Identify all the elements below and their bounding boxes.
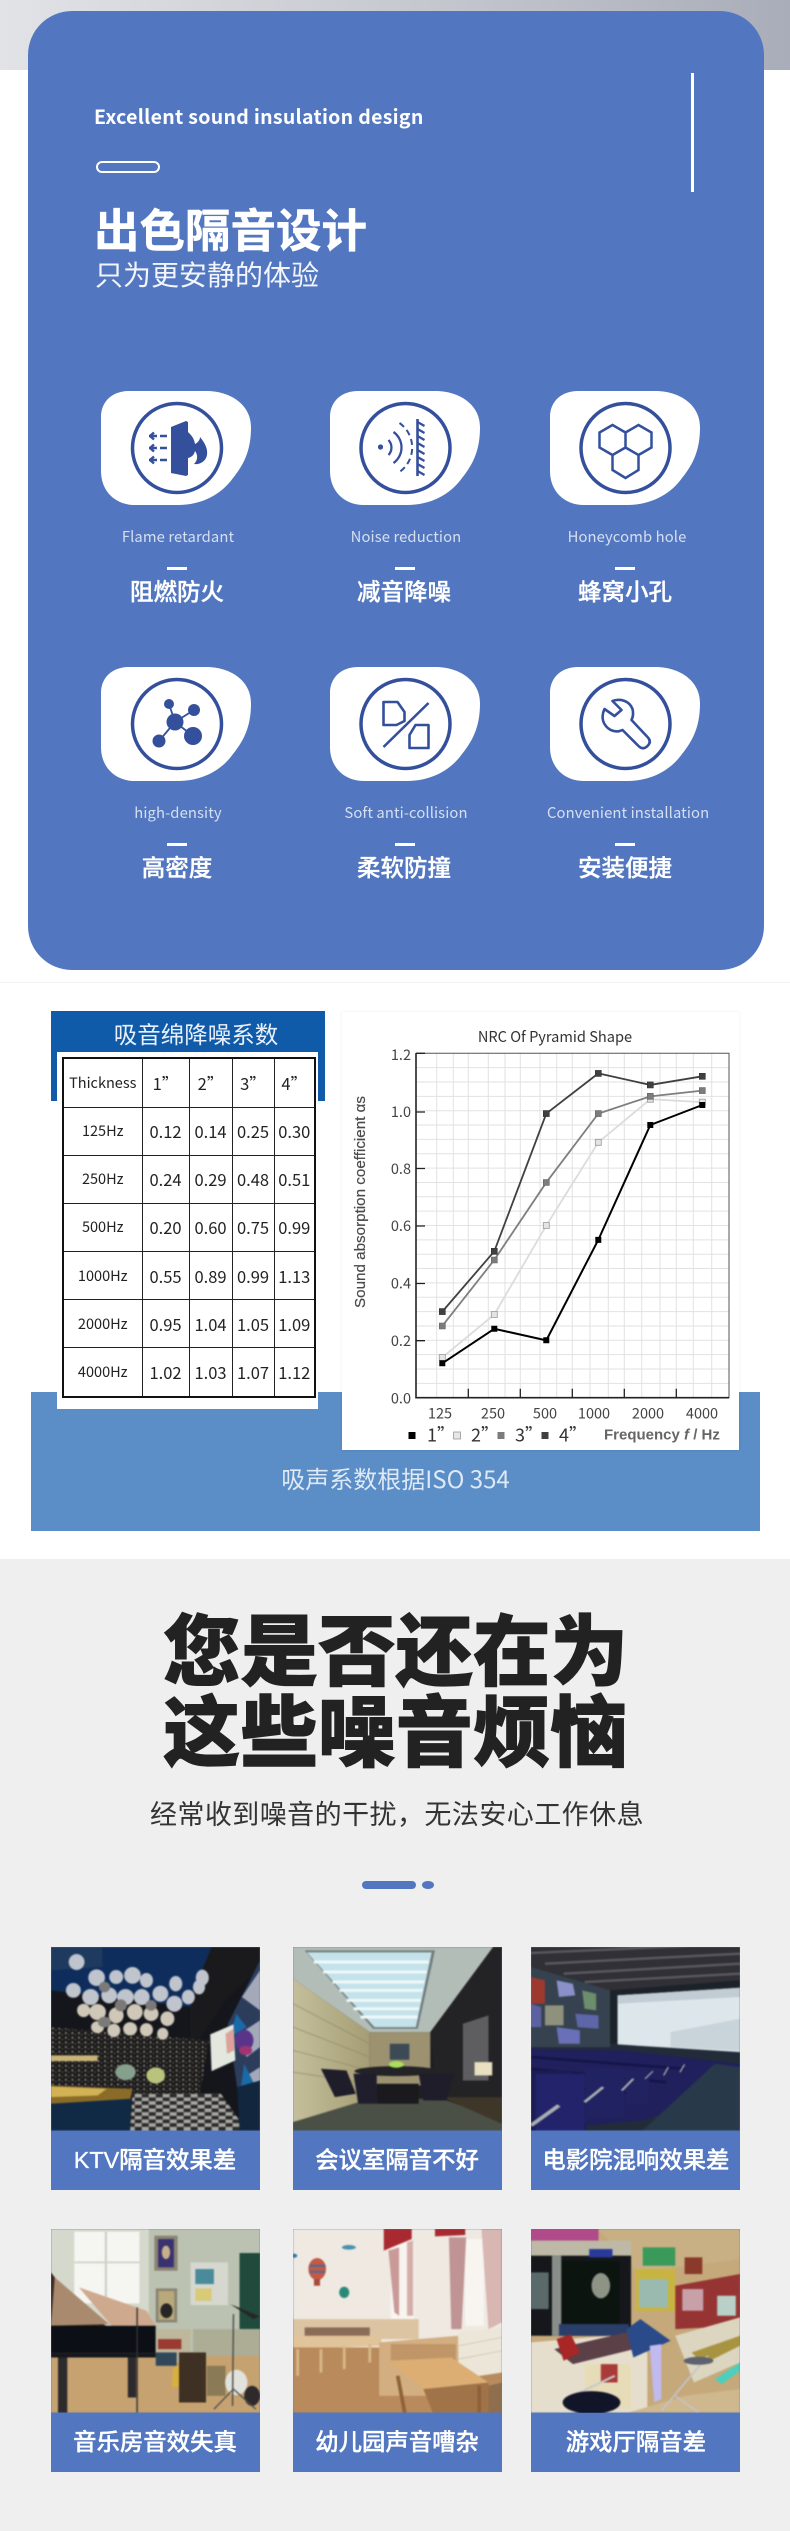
table: sound absorption coefficients <box>62 1057 316 1398</box>
dash <box>167 843 187 846</box>
table header frame <box>51 1011 325 1101</box>
section divider <box>0 982 790 983</box>
vertical accent line <box>691 73 694 192</box>
photo: cinema <box>531 1947 740 2131</box>
table white backing <box>57 1052 318 1409</box>
caption: 电影院混响效果差 <box>542 2147 729 2173</box>
section heading: 这些噪音烦恼 <box>163 1671 628 1783</box>
feature: honeycomb hole <box>550 391 700 505</box>
caption: 游戏厅隔音差 <box>566 2428 706 2454</box>
table: sound absorption coefficients: 2” <box>198 1071 223 1095</box>
chart axes <box>416 1053 729 1398</box>
pill ornament <box>362 1881 416 1889</box>
label: flame retardant chinese: 阻燃防火 <box>130 573 224 607</box>
section heading <box>163 1590 628 1783</box>
chart title: NRC Of Pyramid Shape <box>478 1026 632 1047</box>
chart: NRC of pyramid shape <box>342 1012 739 1450</box>
label: flame retardant english: Flame retardant <box>122 526 234 547</box>
table: sound absorption coefficients: 0.99 <box>278 1215 310 1239</box>
feature: flame retardant <box>101 391 251 505</box>
table: sound absorption coefficients: 1.02 <box>149 1360 182 1384</box>
dash <box>615 843 635 846</box>
section background: noise problems <box>0 1559 790 2531</box>
table: sound absorption coefficients: 1.12 <box>278 1360 310 1384</box>
x axis tick labels <box>428 1402 718 1424</box>
table: sound absorption coefficients: 2000Hz <box>78 1313 128 1334</box>
chart legend: 4” <box>559 1422 587 1448</box>
caption band <box>31 1392 760 1531</box>
table: sound absorption coefficients: 4000Hz <box>78 1361 128 1382</box>
y axis tick labels: 0.2 <box>391 1330 411 1351</box>
label: high density english: high-density <box>134 802 222 823</box>
table: sound absorption coefficients: 0.95 <box>149 1312 182 1336</box>
y axis tick labels: 1.2 <box>391 1044 411 1065</box>
table: sound absorption coefficients: 0.89 <box>194 1264 227 1288</box>
icon: wrench <box>550 667 700 781</box>
section subheading: 经常收到噪音的干扰，无法安心工作休息 <box>150 1793 644 1832</box>
table: sound absorption coefficients: 4” <box>281 1071 307 1095</box>
caption <box>531 2131 740 2190</box>
pill ornament <box>96 161 160 172</box>
subtitle: 只为更安静的体验 <box>95 254 319 294</box>
dash <box>395 843 415 846</box>
feature: convenient installation <box>550 667 700 781</box>
icon: molecule <box>101 667 251 781</box>
caption: 会议室隔音不好 <box>315 2147 479 2173</box>
photo: music room <box>51 2229 260 2413</box>
top gradient band <box>0 0 790 70</box>
dash <box>395 567 415 570</box>
table: sound absorption coefficients: 125Hz <box>82 1120 124 1141</box>
table: sound absorption coefficients: 1.13 <box>278 1264 310 1288</box>
chart legend <box>408 1422 587 1448</box>
table: sound absorption coefficients: 0.25 <box>237 1119 269 1143</box>
main title: 出色隔音设计 <box>94 195 367 261</box>
table: sound absorption coefficients: 0.12 <box>149 1119 182 1143</box>
y axis tick labels: 0.4 <box>391 1272 411 1294</box>
table: sound absorption coefficients: Thickness <box>69 1072 136 1093</box>
table: sound absorption coefficients: 0.24 <box>149 1167 182 1191</box>
caption: KTV隔音效果差 <box>74 2147 236 2173</box>
table: sound absorption coefficients: 0.30 <box>278 1119 310 1143</box>
feature: high density <box>101 667 251 781</box>
table: sound absorption coefficients: 1.05 <box>237 1312 269 1336</box>
y axis title: Sound absorption coefficient αs <box>352 1096 369 1308</box>
section heading: 您是否还在为 <box>163 1590 628 1702</box>
icon: sound waves <box>330 391 480 505</box>
label: honeycomb chinese: 蜂窝小孔 <box>578 573 672 607</box>
x axis tick labels: 125 <box>428 1402 452 1424</box>
chart legend: 3” <box>515 1422 543 1448</box>
table: sound absorption coefficients: 0.60 <box>194 1215 227 1239</box>
y axis tick labels <box>391 1044 411 1408</box>
table: sound absorption coefficients: 0.20 <box>149 1215 182 1239</box>
series 2 inch <box>439 1096 705 1360</box>
x axis tick labels: 500 <box>533 1402 557 1424</box>
table: sound absorption coefficients: 0.75 <box>237 1215 269 1239</box>
card: meeting room <box>293 1947 502 2190</box>
table: sound absorption coefficients: 0.29 <box>194 1167 227 1191</box>
english heading: Excellent sound insulation design <box>94 101 424 130</box>
series 4 inch <box>439 1070 705 1315</box>
caption <box>50 2131 260 2190</box>
label: convenient installation chinese: 安装便捷 <box>578 849 672 883</box>
table: sound absorption coefficients: 1.07 <box>237 1360 269 1384</box>
table: sound absorption coefficients: 500Hz <box>82 1216 124 1237</box>
photo: meeting room <box>293 1947 502 2131</box>
x axis tick labels: 2000 <box>632 1402 664 1424</box>
table: sound absorption coefficients: 0.48 <box>237 1167 269 1191</box>
table: sound absorption coefficients: 0.55 <box>149 1264 182 1288</box>
table title: 吸音绵降噪系数 <box>114 1016 278 1050</box>
label: soft anti-collision english: Soft anti-collision <box>344 802 468 823</box>
caption <box>293 2131 502 2190</box>
card: cinema <box>531 1947 740 2190</box>
y axis tick labels: 0.0 <box>391 1388 411 1408</box>
dot ornament <box>422 1881 434 1889</box>
caption <box>50 2412 260 2472</box>
label: convenient installation english: Convenient installation <box>547 802 709 823</box>
chart legend: 2” <box>471 1422 499 1448</box>
caption: 幼儿园声音嘈杂 <box>315 2428 479 2454</box>
panel: sound insulation design <box>28 11 764 970</box>
feature: noise reduction <box>330 391 480 505</box>
series 1 inch <box>439 1102 705 1366</box>
y axis tick labels: 0.6 <box>391 1215 411 1236</box>
label: noise reduction english: Noise reduction <box>351 526 461 547</box>
photo: game arcade <box>531 2229 740 2413</box>
icon: flame door <box>101 391 251 505</box>
table: sound absorption coefficients: 1000Hz <box>78 1265 128 1286</box>
series 3 inch <box>439 1088 705 1329</box>
caption <box>293 2412 502 2472</box>
table: sound absorption coefficients: 0.14 <box>194 1119 227 1143</box>
card: kindergarten <box>293 2229 502 2472</box>
label: noise reduction chinese: 减音降噪 <box>357 573 451 607</box>
x axis title: Frequency f / Hz <box>604 1426 720 1444</box>
icon: percent shapes <box>330 667 480 781</box>
card: arcade <box>531 2229 740 2472</box>
y axis tick labels: 0.8 <box>391 1158 411 1179</box>
feature: soft anti-collision <box>330 667 480 781</box>
caption: 音乐房音效失真 <box>73 2428 237 2454</box>
table: sound absorption coefficients: 250Hz <box>82 1168 124 1189</box>
table: sound absorption coefficients: 1.03 <box>194 1360 227 1384</box>
photo: KTV room with balloons <box>51 1947 260 2131</box>
table: sound absorption coefficients: 0.51 <box>278 1167 310 1191</box>
x axis tick labels: 4000 <box>686 1402 718 1424</box>
card: KTV <box>50 1947 260 2190</box>
caption <box>531 2412 740 2472</box>
table: sound absorption coefficients: 1.09 <box>278 1312 310 1336</box>
x axis tick labels: 250 <box>481 1402 505 1424</box>
label: soft anti-collision chinese: 柔软防撞 <box>357 849 451 883</box>
icon: honeycomb <box>550 391 700 505</box>
photo: kindergarten <box>293 2229 502 2413</box>
chart legend: 1” <box>427 1422 455 1448</box>
table: sound absorption coefficients: 1.04 <box>194 1312 227 1336</box>
table: sound absorption coefficients: 1” <box>153 1071 178 1095</box>
label: honeycomb english: Honeycomb hole <box>568 526 686 547</box>
dash <box>167 567 187 570</box>
dash <box>615 567 635 570</box>
table: sound absorption coefficients: 0.99 <box>237 1264 269 1288</box>
table: sound absorption coefficients: 3” <box>240 1071 266 1095</box>
x axis tick labels: 1000 <box>578 1402 610 1424</box>
card: music room <box>50 2229 260 2472</box>
caption text: 吸声系数根据ISO 354 <box>281 1460 510 1495</box>
y axis tick labels: 1.0 <box>391 1101 411 1122</box>
label: high density chinese: 高密度 <box>142 849 212 883</box>
